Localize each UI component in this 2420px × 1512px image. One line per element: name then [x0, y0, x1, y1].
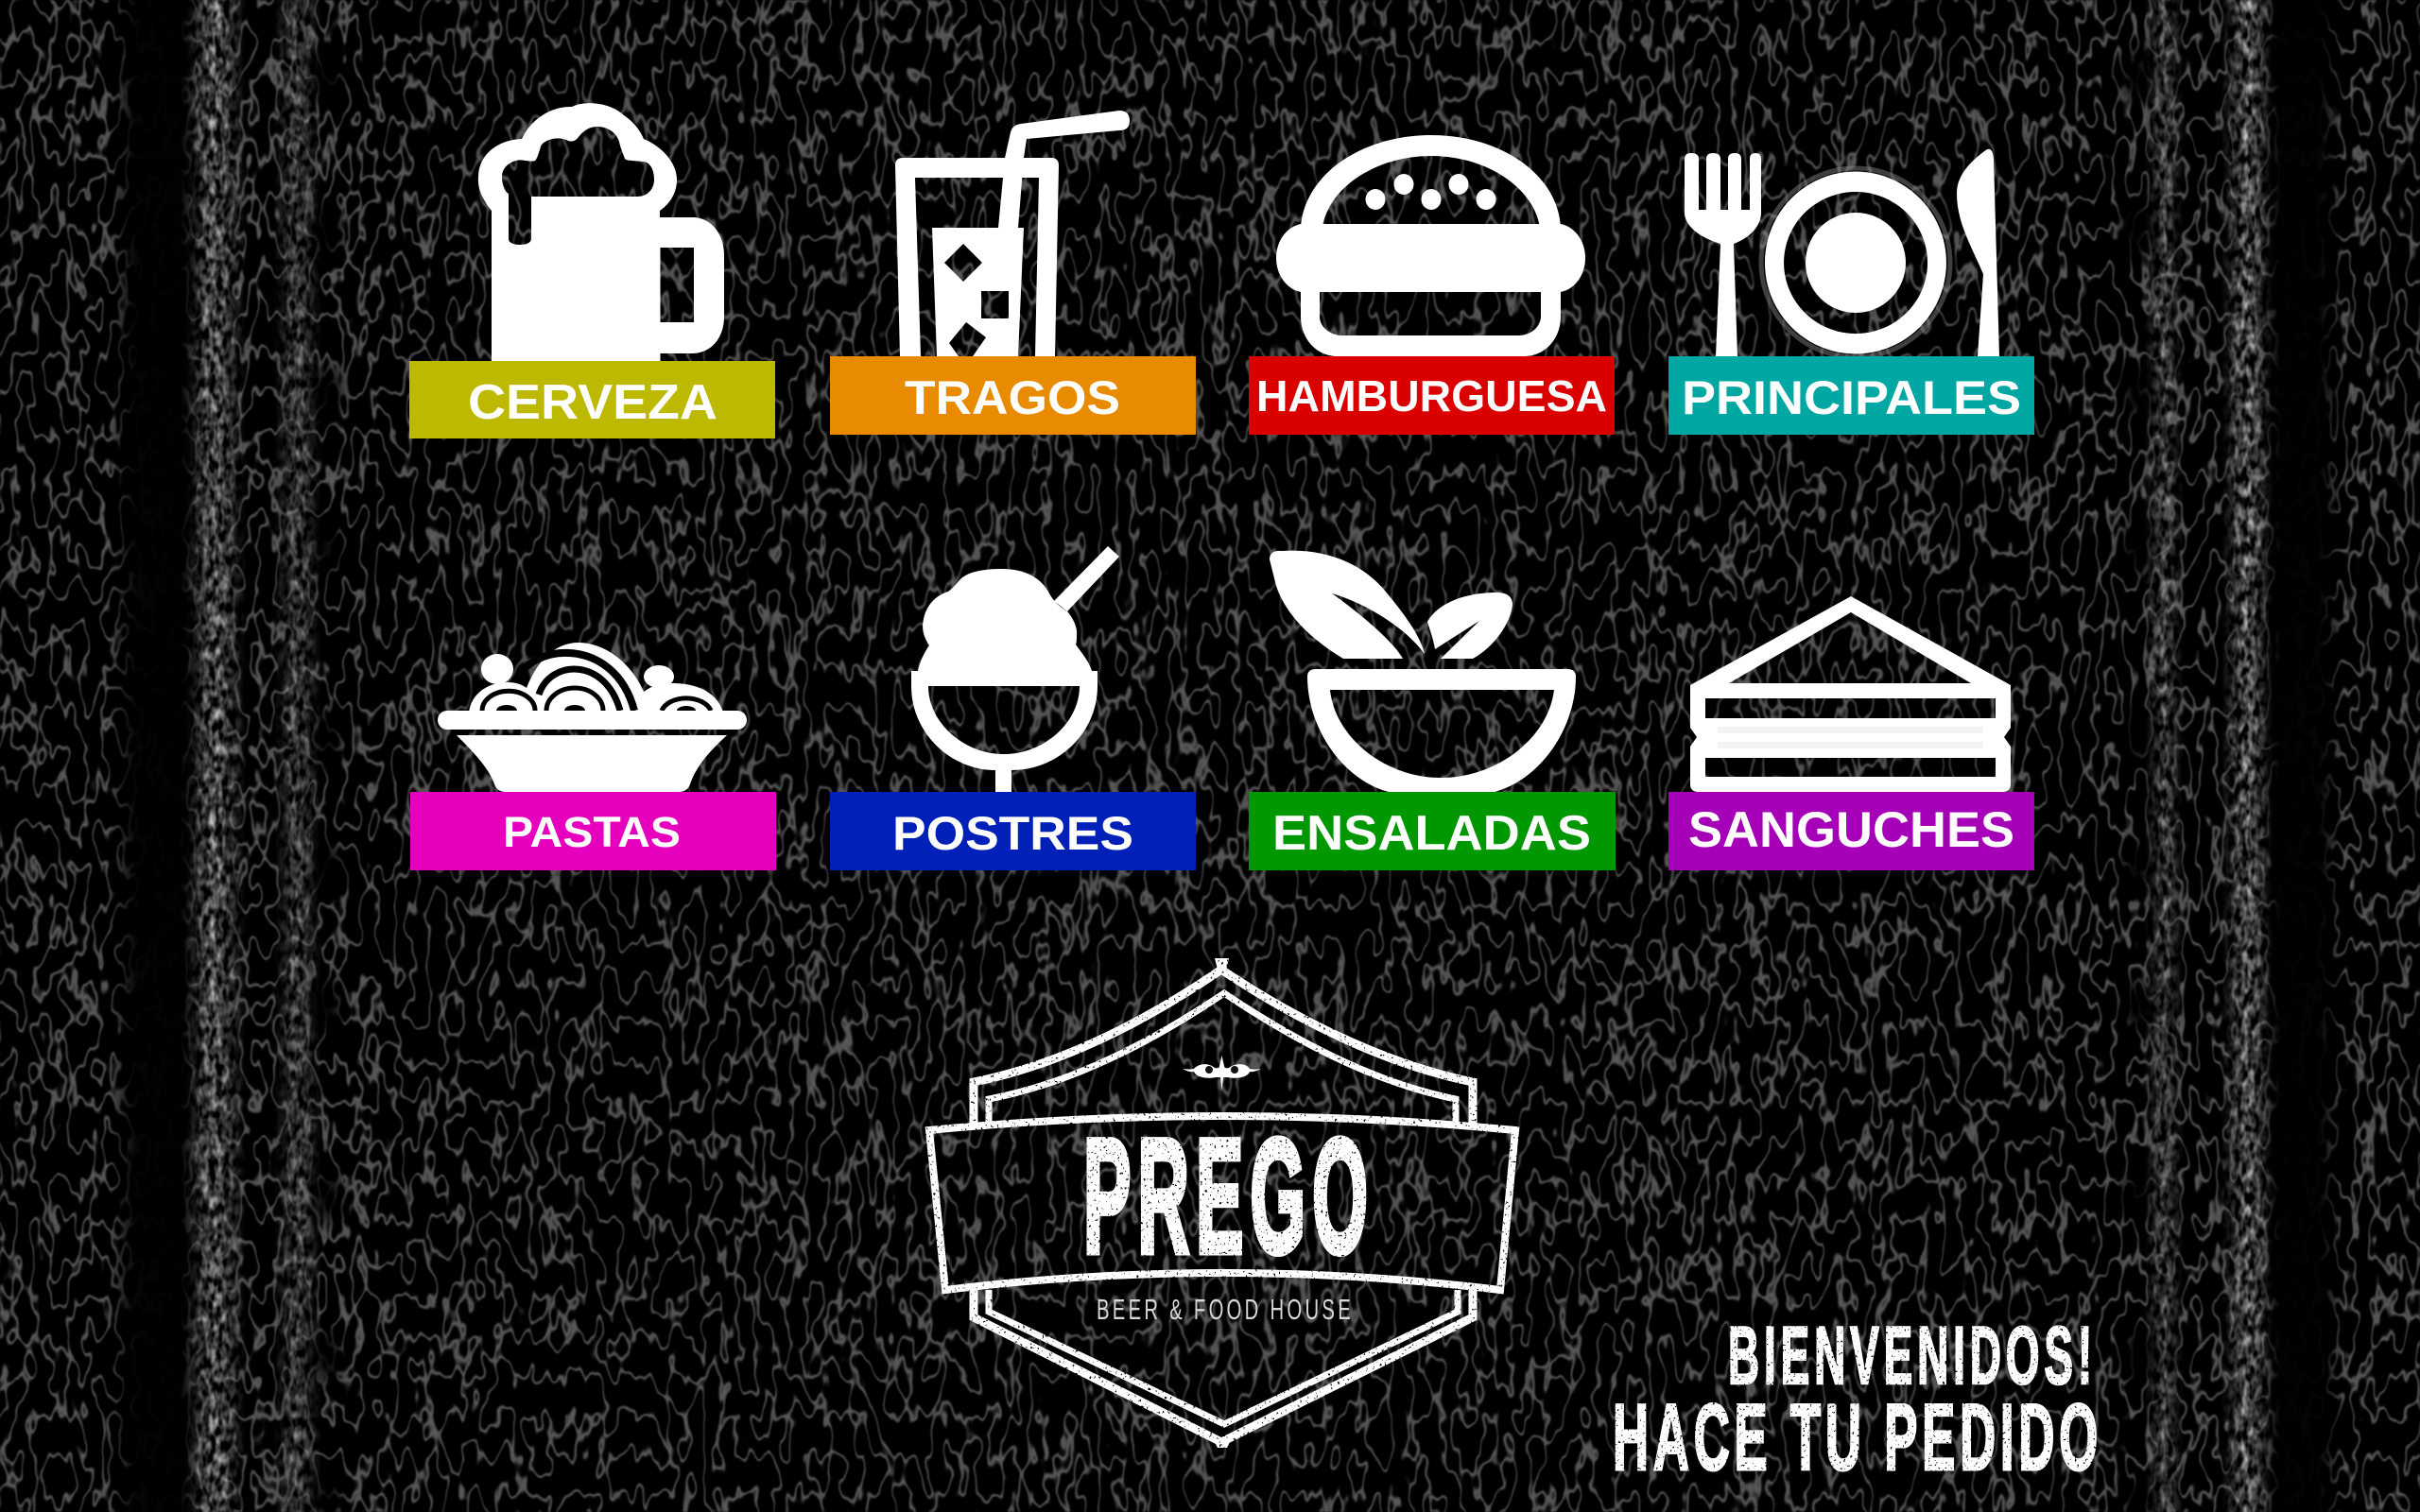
- call to action: welcome text: [1613, 1311, 2102, 1489]
- label: hamburguesa: HAMBURGUESA: [1256, 371, 1607, 421]
- menu item: hamburguesa: [1249, 135, 1615, 435]
- menu item: ensaladas: [1249, 551, 1616, 870]
- icon: bowl of pasta: [438, 643, 747, 792]
- label: pastas: PASTAS: [503, 808, 681, 856]
- label: pastas: [410, 792, 776, 870]
- icon: ice cream cup: [911, 546, 1119, 792]
- logo: Prego badge: [929, 958, 1515, 1448]
- label: principales: [1668, 356, 2034, 435]
- label: hamburguesa: [1249, 356, 1615, 435]
- menu item: sanguches: [1668, 596, 2034, 870]
- label: sanguches: [1668, 792, 2034, 870]
- icon: plate with fork and knife: [1685, 149, 1999, 357]
- menu item: tragos: [830, 111, 1196, 435]
- label: postres: POSTRES: [892, 807, 1133, 860]
- label: principales: PRINCIPALES: [1682, 371, 2021, 424]
- menu item: postres: [830, 546, 1196, 870]
- icon: logo ornament: [1183, 1056, 1261, 1091]
- label: cerveza: CERVEZA: [468, 375, 717, 430]
- label: cerveza: [409, 361, 775, 438]
- menu item: pastas: [410, 643, 776, 870]
- icon: salad bowl with leaves: [1270, 551, 1576, 792]
- label: postres: [830, 792, 1196, 870]
- label: tragos: [830, 356, 1196, 435]
- icon: drink glass with straw: [895, 111, 1130, 356]
- label: ensaladas: ENSALADAS: [1272, 806, 1591, 861]
- menu item: cerveza: [409, 103, 775, 438]
- call to action: welcome text: BIENVENIDOS!: [1728, 1311, 2097, 1401]
- label: sanguches: SANGUCHES: [1688, 802, 2014, 858]
- menu item: principales: [1668, 149, 2034, 435]
- logo tagline: BEER & FOOD HOUSE: [1097, 1293, 1354, 1326]
- logo: Prego badge: PREGO: [1083, 1106, 1374, 1287]
- icon: sandwich: [1690, 596, 2011, 792]
- label: ensaladas: [1249, 792, 1616, 870]
- label: tragos: TRAGOS: [905, 371, 1120, 424]
- badge outline: [929, 970, 1515, 1442]
- icon: beer mug: [478, 103, 724, 361]
- icon: hamburger: [1276, 135, 1585, 356]
